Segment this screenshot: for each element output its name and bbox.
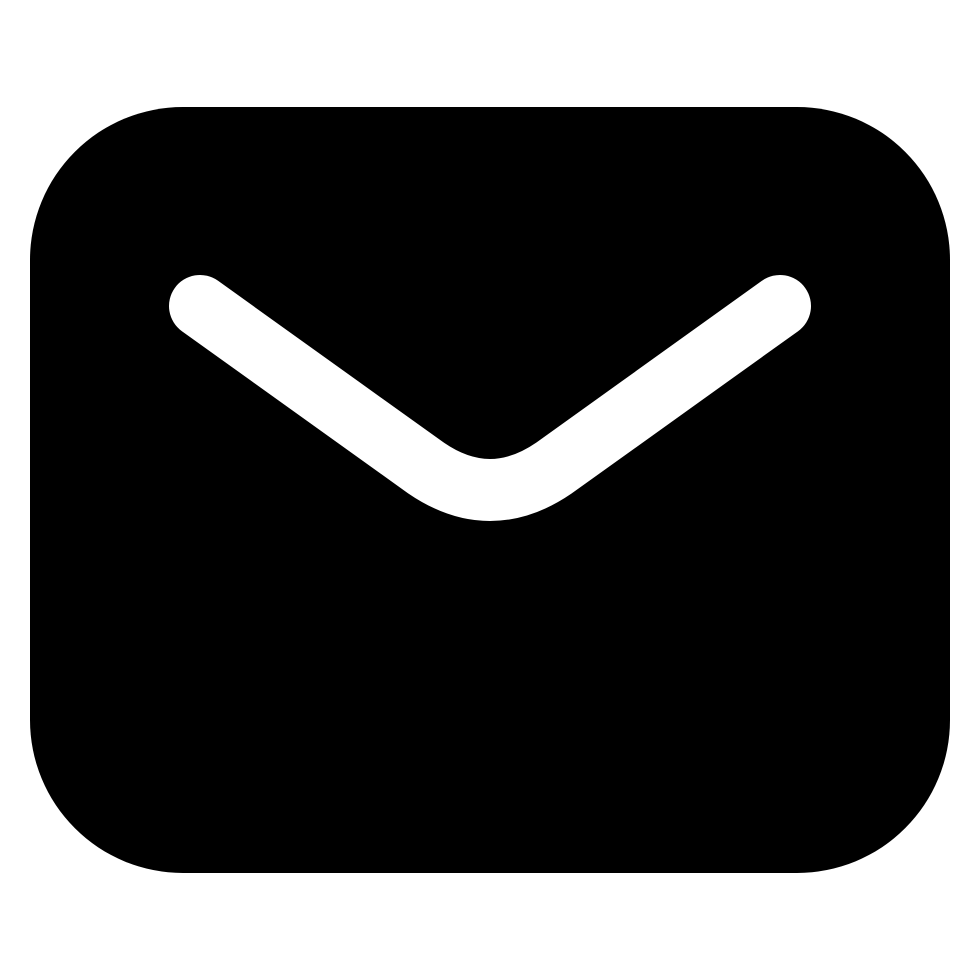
envelope body	[30, 107, 950, 873]
envelope flap line	[200, 306, 780, 490]
